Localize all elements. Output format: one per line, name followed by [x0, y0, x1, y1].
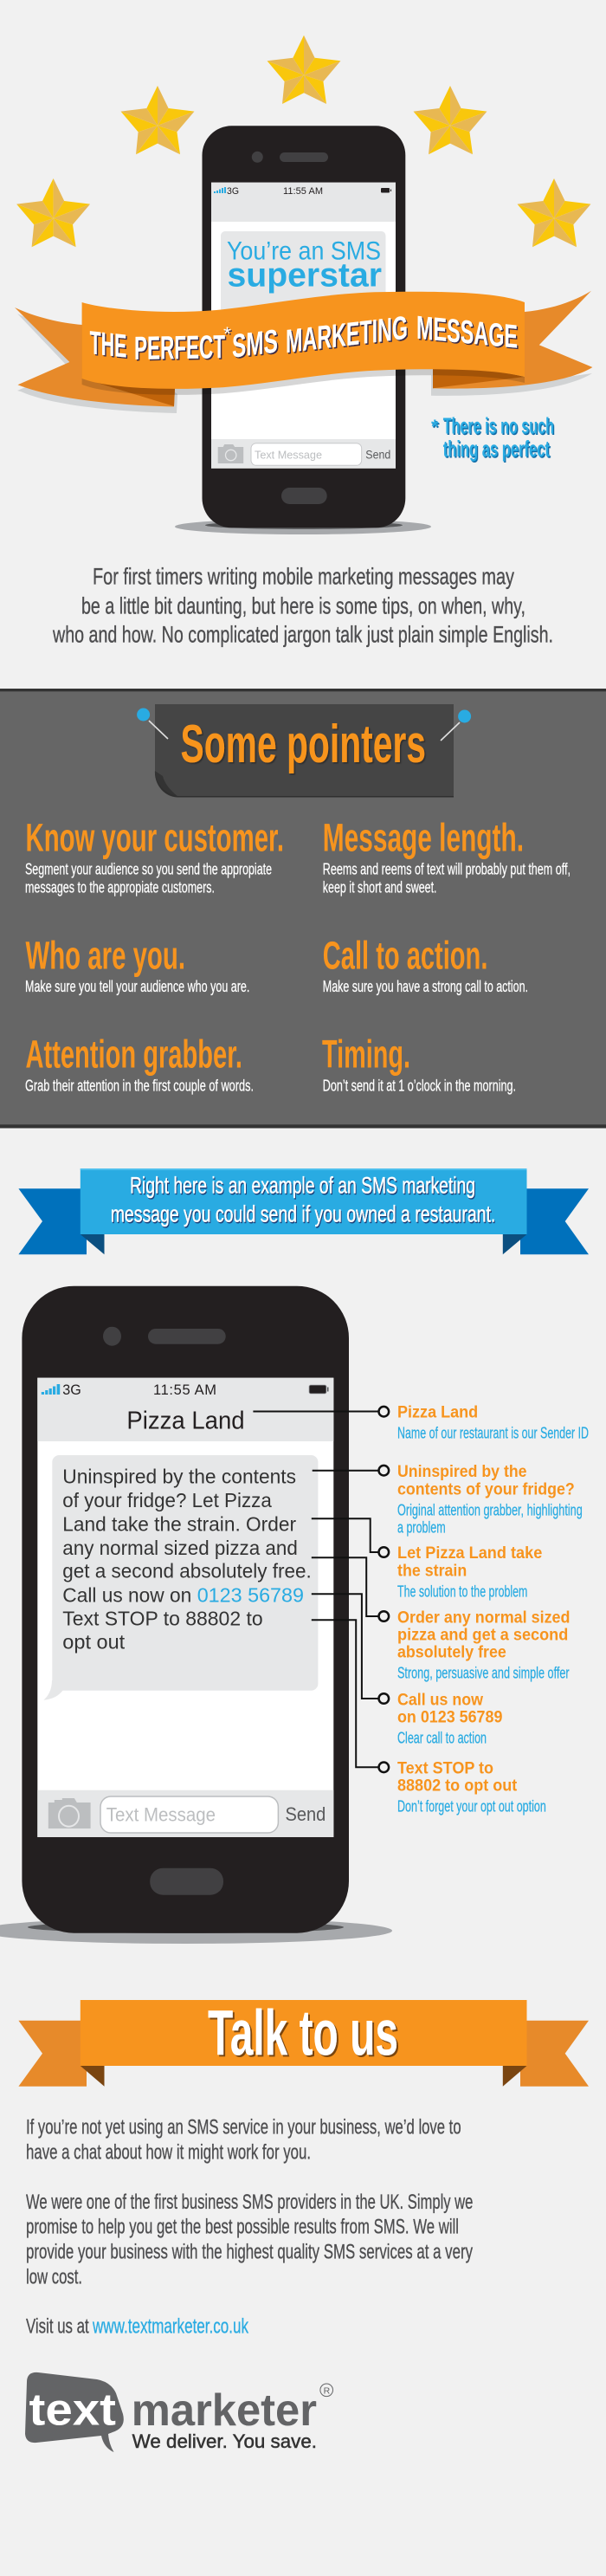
message bubble [43, 1455, 318, 1700]
message bubble: opt out [62, 1630, 126, 1653]
talk to us ribbon [18, 1997, 589, 2087]
tip: message length: keep it short and sweet. [323, 879, 436, 896]
tip: attention grabber [25, 1032, 254, 1094]
input bar [48, 1796, 326, 1833]
title ribbon: SMS [232, 322, 278, 366]
annotation: call us: Clear call to action [397, 1730, 487, 1747]
annotation: uninspired: a problem [397, 1518, 446, 1536]
title ribbon: MESSAGE [416, 310, 518, 356]
title ribbon: PERFECT [134, 329, 225, 367]
example phone: Pizza Land [126, 1407, 245, 1434]
annotation: text stop: Don’t forget your opt out option [397, 1798, 546, 1815]
annotation: call us [397, 1691, 502, 1747]
tip: timing: Don’t send it at 1 o’clock in the morning. [323, 1077, 516, 1094]
annotation: order [397, 1608, 570, 1681]
message bubble: get a second absolutely free. [62, 1560, 312, 1582]
talk to us body text: www.textmarketer.co.uk [92, 2314, 249, 2338]
tip: know your customer [25, 816, 284, 896]
message bubble: any normal sized pizza and [62, 1537, 298, 1559]
hero phone: 11:55 AM [283, 186, 323, 197]
annotation connectors [253, 1407, 389, 1772]
annotation: uninspired: Uninspired by the [397, 1463, 526, 1481]
example phone: 3G [62, 1382, 81, 1398]
tip: know your customer: Segment your audience so you send the appropiate [25, 860, 272, 877]
example phone [0, 1286, 392, 1944]
talk to us ribbon: Talk to us [208, 1997, 398, 2068]
annotation: text stop: Text STOP to [397, 1759, 493, 1777]
annotation: uninspired [397, 1463, 583, 1536]
input bar: Text Message [106, 1804, 216, 1826]
panel: some pointers [0, 689, 606, 1128]
talk to us body text: have a chat about how it might work for you. [26, 2140, 311, 2164]
talk to us body text [26, 2115, 473, 2338]
hero phone [175, 126, 431, 534]
annotation: let pizza land: the strain [397, 1562, 467, 1580]
tip: know your customer: messages to the appropiate customers. [25, 879, 215, 896]
tip: attention grabber: Grab their attention in the first couple of words. [25, 1077, 254, 1094]
tip: who are you [25, 934, 249, 995]
tip: know your customer: Know your customer. [26, 816, 284, 860]
title ribbon: MARKETING [286, 309, 408, 360]
talk to us body text: low cost. [26, 2266, 82, 2289]
annotation: pizza land [397, 1404, 589, 1442]
hero phone: Text Message [255, 448, 322, 461]
message bubble: 0123 56789 [197, 1583, 304, 1606]
annotation: call us: on 0123 56789 [397, 1709, 502, 1727]
textmarketer logo: We deliver. You save. [132, 2430, 317, 2452]
tip: call to action: Call to action. [323, 934, 487, 978]
textmarketer logo: text [29, 2385, 116, 2436]
pointers heading plaque: Some pointers [180, 715, 426, 774]
annotation: let pizza land: The solution to the problem [397, 1582, 527, 1600]
annotation: text stop: 88802 to opt out [397, 1777, 518, 1796]
message bubble: Text STOP to 88802 to [62, 1608, 263, 1630]
message bubble: Uninspired by the contents [62, 1466, 296, 1488]
footnote [431, 413, 554, 462]
message bubble: Call us now on [62, 1583, 191, 1606]
annotation: let pizza land [397, 1544, 542, 1600]
blue ribbon: Right here is an example of an SMS marketing [130, 1172, 475, 1198]
title ribbon [15, 291, 592, 413]
tip: message length [323, 816, 571, 896]
footnote: thing as perfect [443, 436, 550, 462]
annotation: order: pizza and get a second [397, 1626, 568, 1644]
annotation: pizza land: Pizza Land [397, 1404, 478, 1422]
textmarketer logo [25, 2372, 333, 2452]
tip: call to action [323, 934, 528, 995]
hero phone: superstar [227, 257, 382, 294]
example phone: 11:55 AM [153, 1382, 216, 1398]
input bar: Send [286, 1803, 326, 1825]
tip: who are you: Make sure you tell your audience who you are. [25, 978, 249, 995]
hero phone: You’re an SMS [227, 237, 381, 266]
hero phone: Send [365, 447, 390, 461]
message bubble: of your fridge? Let Pizza [62, 1489, 273, 1511]
pointers heading plaque [137, 704, 471, 797]
annotation: order: absolutely free [397, 1644, 506, 1662]
footnote: * [431, 416, 439, 437]
blue ribbon [18, 1168, 589, 1254]
tip: who are you: Who are you. [26, 934, 185, 978]
intro text [52, 563, 553, 648]
tip: timing: Timing. [322, 1032, 410, 1077]
talk to us body text: Visit us at [26, 2314, 89, 2338]
title ribbon: THE [90, 325, 126, 366]
message bubble: Land take the strain. Order [62, 1513, 296, 1536]
annotation: let pizza land: Let Pizza Land take [397, 1544, 542, 1563]
title ribbon: * [223, 323, 231, 345]
hero phone: 3G [227, 186, 239, 197]
annotation: uninspired: contents of your fridge? [397, 1480, 575, 1498]
annotation: order: Order any normal sized [397, 1608, 570, 1627]
tip: timing [322, 1032, 516, 1094]
textmarketer logo: marketer [132, 2385, 317, 2436]
textmarketer logo: R [324, 2385, 331, 2396]
tip: attention grabber: Attention grabber. [26, 1032, 242, 1077]
annotation: call us: Call us now [397, 1691, 483, 1709]
stars arc [16, 36, 591, 247]
annotation: text stop [397, 1759, 546, 1815]
